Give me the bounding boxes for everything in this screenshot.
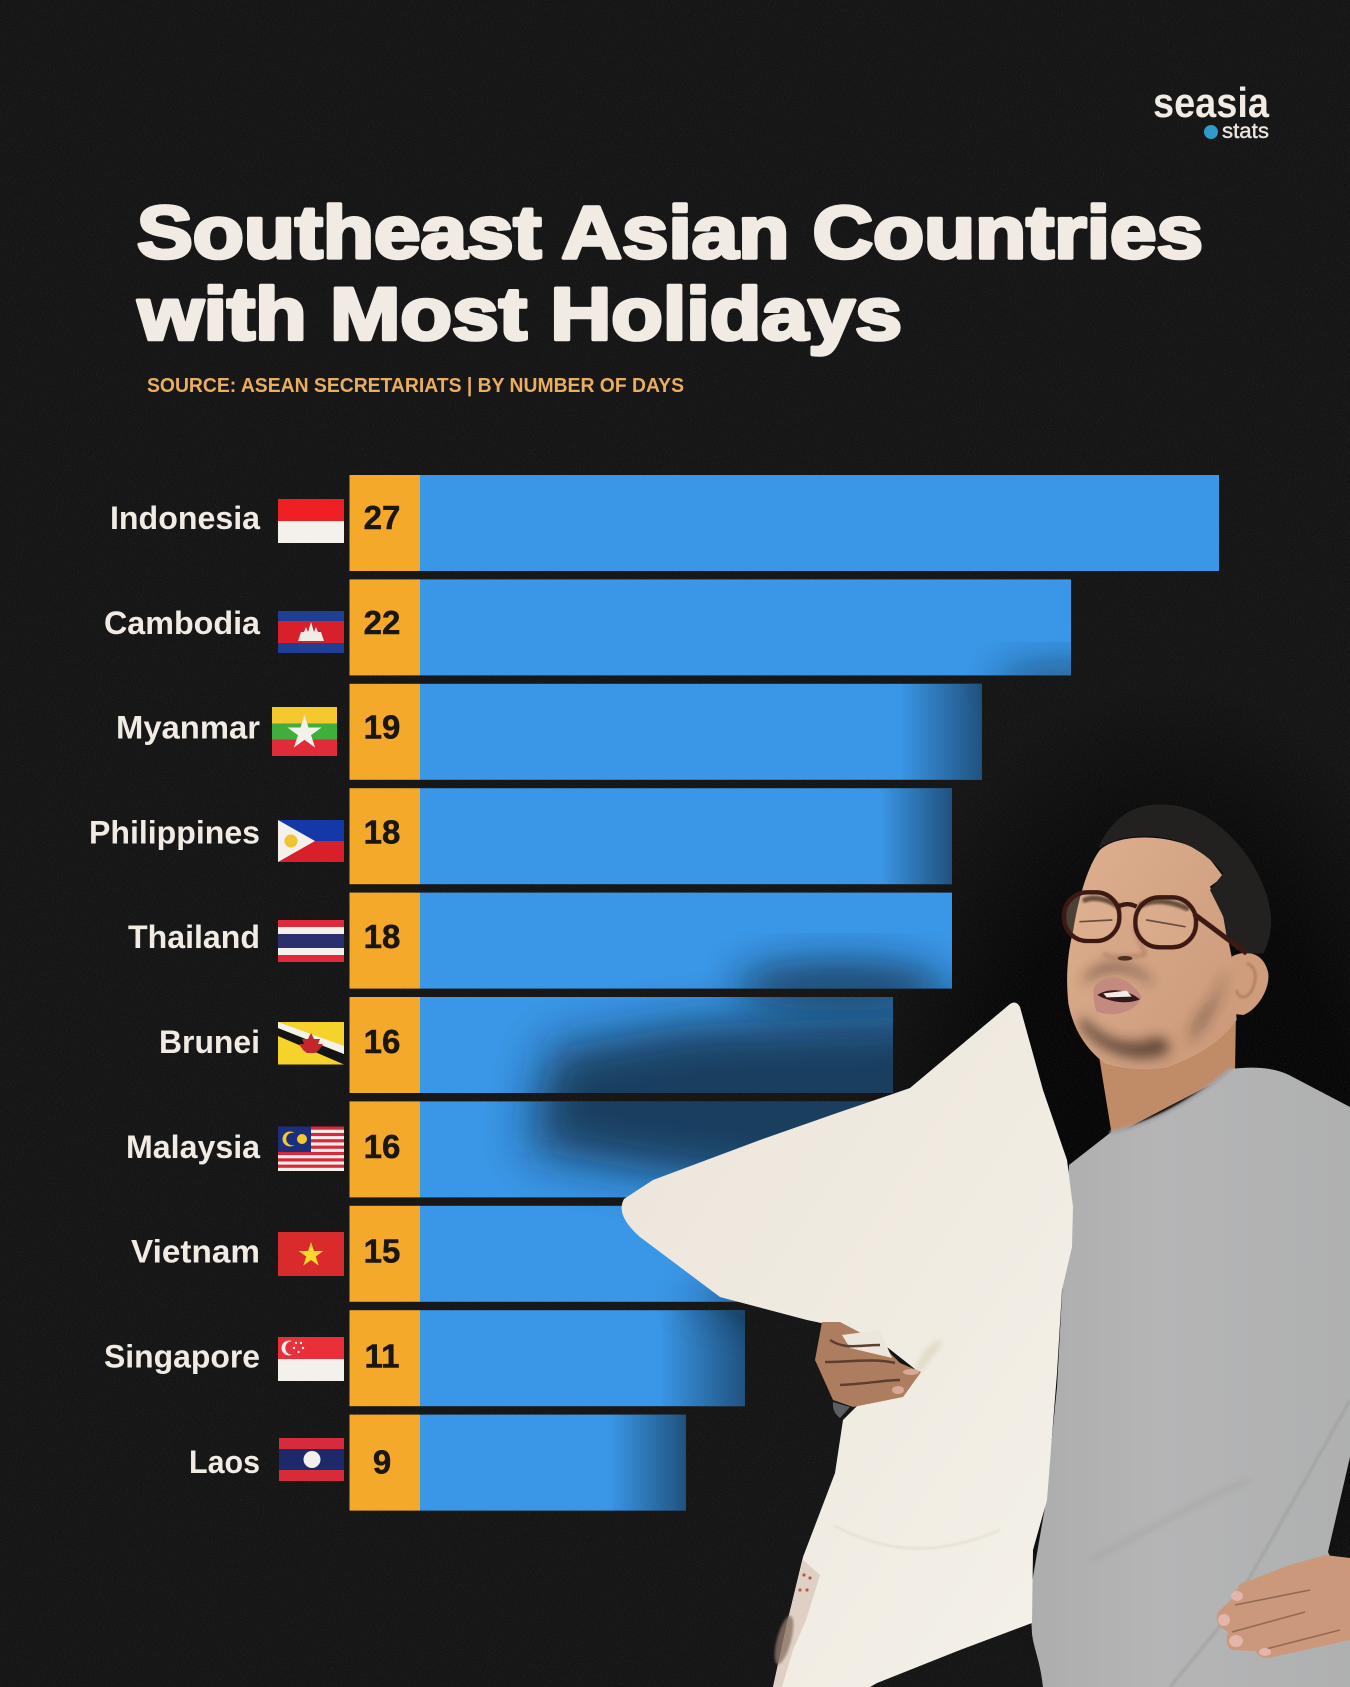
row: Laos: Laos	[189, 1444, 260, 1480]
row: Indonesia: 27	[364, 499, 400, 536]
embroidered pillow patch	[771, 1560, 820, 1687]
row: Cambodia: Cambodia	[104, 605, 260, 641]
row: Laos	[189, 1415, 686, 1511]
title: with Most Holidays	[137, 272, 902, 356]
row: Singapore: Singapore	[104, 1338, 260, 1374]
row: Indonesia	[110, 475, 1219, 571]
row: Vietnam: 15	[364, 1233, 400, 1270]
row: Indonesia: Indonesia	[110, 500, 260, 536]
grey t-shirt	[1030, 1068, 1350, 1687]
logo: seasia stats: seasia	[1153, 79, 1270, 126]
row: Vietnam: Vietnam	[131, 1234, 260, 1270]
row: Vietnam	[131, 1206, 745, 1302]
row: Philippines: Philippines	[89, 814, 260, 850]
mouth	[1093, 977, 1142, 1014]
row: Philippines: 18	[364, 813, 400, 850]
nose	[1103, 927, 1145, 957]
row: Cambodia	[104, 579, 1071, 675]
neck	[1098, 1010, 1236, 1136]
title	[137, 191, 1203, 356]
row: Cambodia: 22	[364, 604, 400, 641]
title: Southeast Asian Countries	[137, 191, 1203, 274]
row: Brunei	[159, 997, 893, 1093]
hair	[1098, 804, 1271, 953]
bar chart	[89, 475, 1219, 1511]
row: Philippines	[89, 788, 952, 884]
logo: seasia stats: stats	[1222, 120, 1269, 143]
head	[1064, 804, 1271, 1069]
row: Myanmar: Myanmar	[116, 710, 260, 746]
row: Thailand: Thailand	[128, 919, 260, 955]
ear	[1228, 953, 1268, 1015]
row: Malaysia: Malaysia	[126, 1129, 260, 1165]
shadow cast on bars	[530, 662, 1135, 1330]
glasses	[1064, 892, 1247, 953]
person holding pillow	[622, 804, 1350, 1687]
row: Myanmar: 19	[364, 709, 400, 746]
left hand gripping pillow	[815, 1322, 921, 1418]
row: Myanmar	[116, 684, 982, 780]
row: Thailand: 18	[364, 918, 400, 955]
row: Malaysia: 16	[364, 1128, 400, 1165]
row: Singapore	[104, 1310, 745, 1406]
pillow	[622, 1003, 1073, 1687]
closed eyes and brows	[1080, 898, 1187, 927]
face	[1067, 837, 1237, 1069]
right hand on hip	[1217, 1555, 1350, 1658]
row: Malaysia	[126, 1101, 893, 1197]
row: Singapore: 11	[365, 1337, 399, 1374]
row: Brunei: Brunei	[159, 1024, 260, 1060]
logo: seasia stats	[1153, 79, 1270, 143]
source subtitle: SOURCE: ASEAN SECRETARIATS | BY NUMBER OF DAYS	[147, 375, 684, 397]
row: Brunei: 16	[364, 1023, 400, 1060]
beard	[1078, 964, 1227, 1058]
row: Laos: 9	[373, 1444, 391, 1480]
row: Thailand	[128, 893, 952, 989]
